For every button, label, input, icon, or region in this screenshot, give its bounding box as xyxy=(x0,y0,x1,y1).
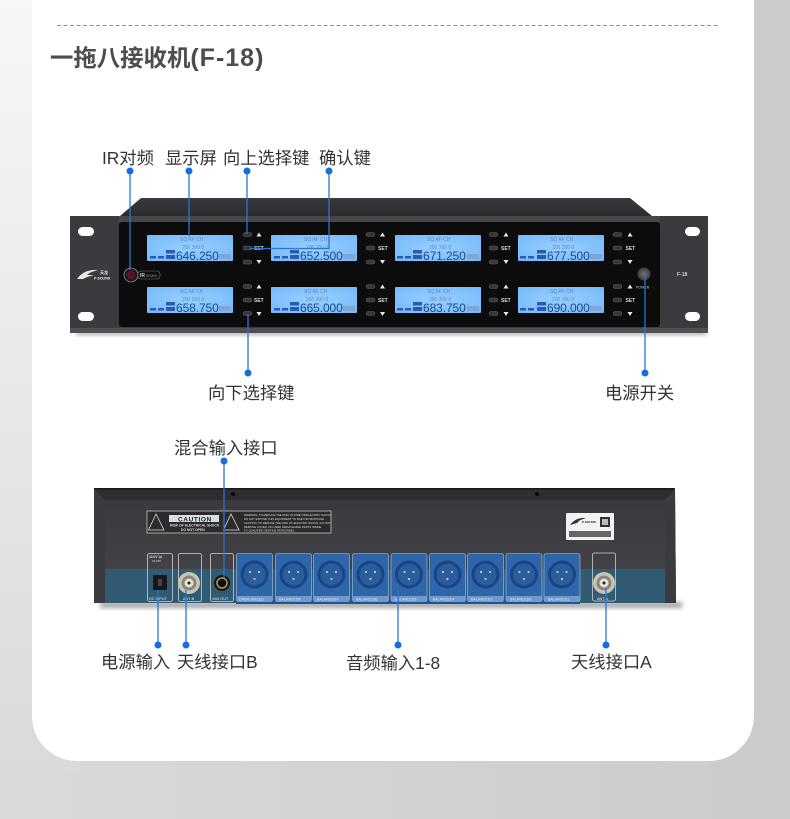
LCD 3: SQ AF CH xyxy=(427,237,451,243)
LCD 6: 200 200 0 xyxy=(306,297,328,303)
caution label: DO NOT OPEN xyxy=(181,528,205,532)
caution label xyxy=(147,511,331,533)
XLR 6: BALANCED6 xyxy=(356,598,377,602)
ANT-B connector: ANT-B xyxy=(183,597,195,601)
black faceplate xyxy=(119,222,660,327)
LCD 1 xyxy=(147,235,233,263)
callout: 确认键: 确认键 xyxy=(319,148,371,168)
teal lower band xyxy=(105,569,665,603)
channel buttons: SET xyxy=(378,298,388,304)
channel buttons: SET xyxy=(254,246,264,252)
caution label: CAUTION xyxy=(178,516,212,524)
caution label: REMOVE COVER. NO USER SERVICEABLE PARTS INSIDE xyxy=(244,525,321,529)
caution label: DO NOT EXPOSE THIS EQUIPMENT TO RAIN OR MOISTURE xyxy=(244,517,324,521)
LCD 4: SQ AF CH xyxy=(550,237,574,243)
LCD 3: 200 200 0 xyxy=(429,245,451,251)
callout: 电源输入 xyxy=(101,590,170,672)
left background strip xyxy=(0,0,80,770)
callout: 天线接口A: 天线接口A xyxy=(571,652,652,672)
LCD 2: 652.500 xyxy=(300,249,343,263)
callout: 电源开关: 电源开关 xyxy=(605,383,674,403)
front chassis with rack ears xyxy=(70,216,708,333)
LCD 6: 665.000 xyxy=(300,301,343,315)
channel buttons: SET xyxy=(626,246,635,252)
XLR unbalanced xyxy=(236,554,272,602)
barcode sticker: P-SOUND xyxy=(582,520,597,524)
DC input: 12.0V 1A xyxy=(149,555,163,559)
MIX OUT jack: MIX OUT xyxy=(212,597,229,601)
callout: 确认键 xyxy=(250,148,371,248)
LCD 5 xyxy=(147,287,233,315)
device shadow xyxy=(76,330,706,335)
callout: 显示屏 xyxy=(165,148,217,236)
barcode sticker xyxy=(566,513,614,540)
LCD 1: SQ AF CH xyxy=(180,237,204,243)
callout: 天线接口A xyxy=(571,588,652,672)
IR window: 00000 xyxy=(146,273,158,278)
caution label: RISK OF ELECTRICAL SHOCK xyxy=(170,524,220,528)
callout: 音频输入1-8 xyxy=(346,590,440,673)
XLR 7 xyxy=(314,554,350,602)
XLR 1 xyxy=(544,554,580,602)
DC input: 24.0W xyxy=(152,559,161,563)
rear shadow xyxy=(100,602,682,608)
LCD 7: 200 200 0 xyxy=(429,297,451,303)
LCD 3 xyxy=(395,235,481,263)
XLR 3: BALANCED3 xyxy=(471,598,492,602)
rack holes xyxy=(78,227,700,321)
LCD 5: 200 200 0 xyxy=(182,297,204,303)
logo xyxy=(77,269,111,280)
title: 一拖八接收机(F-18) xyxy=(50,44,264,72)
XLR block xyxy=(236,554,580,604)
caution label: WARNING: TO REDUCE THE RISK OF FIRE OR ELECTRIC SHOCK xyxy=(244,513,331,517)
callout: 天线接口B: 天线接口B xyxy=(177,652,258,672)
LCD 7: SQ AF CH xyxy=(427,289,451,295)
ANT-A connector: ANT-A xyxy=(597,597,609,601)
callout: IR对频: IR对频 xyxy=(102,148,154,168)
XLR 5 xyxy=(391,554,427,602)
LCD 3: 671.250 xyxy=(423,249,466,263)
LCD 2 xyxy=(271,235,357,263)
LCD 5: SQ AF CH xyxy=(180,289,204,295)
LCD 2: 200 200 0 xyxy=(306,245,328,251)
channel buttons: SET xyxy=(501,298,511,304)
XLR 7: BALANCED7 xyxy=(317,598,338,602)
channel buttons: SET xyxy=(626,298,635,304)
XLR 3 xyxy=(468,554,504,602)
top plate xyxy=(120,198,652,216)
ANT-A connector xyxy=(592,553,616,601)
callout: 混合输入接口: 混合输入接口 xyxy=(174,438,278,458)
channel buttons: SET xyxy=(501,246,511,252)
logo: 天龙 xyxy=(100,269,108,275)
LCD 4 xyxy=(518,235,604,263)
LCD 6 xyxy=(271,287,357,315)
callout: 向下选择键: 向下选择键 xyxy=(208,383,294,403)
LCD 6: SQ AF CH xyxy=(304,289,328,295)
caution label: TO QUALIFIED SERVICE PERSONNEL xyxy=(244,528,295,532)
XLR 2 xyxy=(506,554,542,602)
channel buttons: SET xyxy=(254,298,264,304)
callout: 向上选择键 xyxy=(223,148,309,234)
XLR 8: BALANCED8 xyxy=(279,598,300,602)
LCD 1: 200 200 0 xyxy=(182,245,204,251)
rear chassis xyxy=(94,489,676,603)
callout: 音频输入1-8: 音频输入1-8 xyxy=(346,653,440,673)
XLR 1: BALANCED1 xyxy=(548,598,569,602)
model label: F-18 xyxy=(677,272,688,278)
XLR 5: BALANCED5 xyxy=(395,598,416,602)
dashed divider xyxy=(57,24,720,26)
channel buttons xyxy=(243,232,635,316)
channel buttons: SET xyxy=(378,246,388,252)
power button: POWER xyxy=(636,286,650,290)
LCD 7: 683.750 xyxy=(423,301,466,315)
callout: IR对频 xyxy=(102,148,154,270)
XLR 2: BALANCED2 xyxy=(510,598,531,602)
LCD 8 xyxy=(518,287,604,315)
XLR 4 xyxy=(430,554,466,602)
XLR 4: BALANCED4 xyxy=(433,598,454,602)
caution label: CAUTION: TO REDUCE THE RISK OF ELECTRIC SHOCK, DO NOT xyxy=(244,521,331,525)
LCD 5: 658.750 xyxy=(176,301,219,315)
LCD 8: SQ AF CH xyxy=(550,289,574,295)
power button xyxy=(636,268,650,290)
rear panel device xyxy=(94,488,682,608)
callout: 显示屏: 显示屏 xyxy=(165,148,217,168)
LCD 8: 690.000 xyxy=(547,301,590,315)
ANT-B connector xyxy=(178,554,202,602)
LCD 2: SQ AF CH xyxy=(304,237,328,243)
XLR 6 xyxy=(352,554,388,602)
callout: 电源开关 xyxy=(605,275,674,403)
XLR unbalanced: UNBALANCED xyxy=(239,598,264,602)
callout: 向下选择键 xyxy=(208,314,294,403)
DC input xyxy=(148,554,172,602)
callout: 混合输入接口 xyxy=(174,438,278,578)
LCD 8: 200 200 0 xyxy=(552,297,574,303)
LCD 4: 677.500 xyxy=(547,249,590,263)
callout: 天线接口B xyxy=(177,590,258,672)
LCD 1: 646.250 xyxy=(176,249,219,263)
callout: 向上选择键: 向上选择键 xyxy=(223,148,309,168)
LCD 7 xyxy=(395,287,481,315)
XLR 8 xyxy=(276,554,312,602)
DC input: DC INPUT xyxy=(149,597,168,601)
LCD 4: 200 200 0 xyxy=(552,245,574,251)
logo: P-SOUND xyxy=(94,276,111,280)
IR window: IR xyxy=(140,273,145,279)
IR window xyxy=(124,268,160,282)
MIX OUT jack xyxy=(210,554,234,602)
callout: 电源输入: 电源输入 xyxy=(101,652,170,672)
front panel device xyxy=(70,198,708,335)
